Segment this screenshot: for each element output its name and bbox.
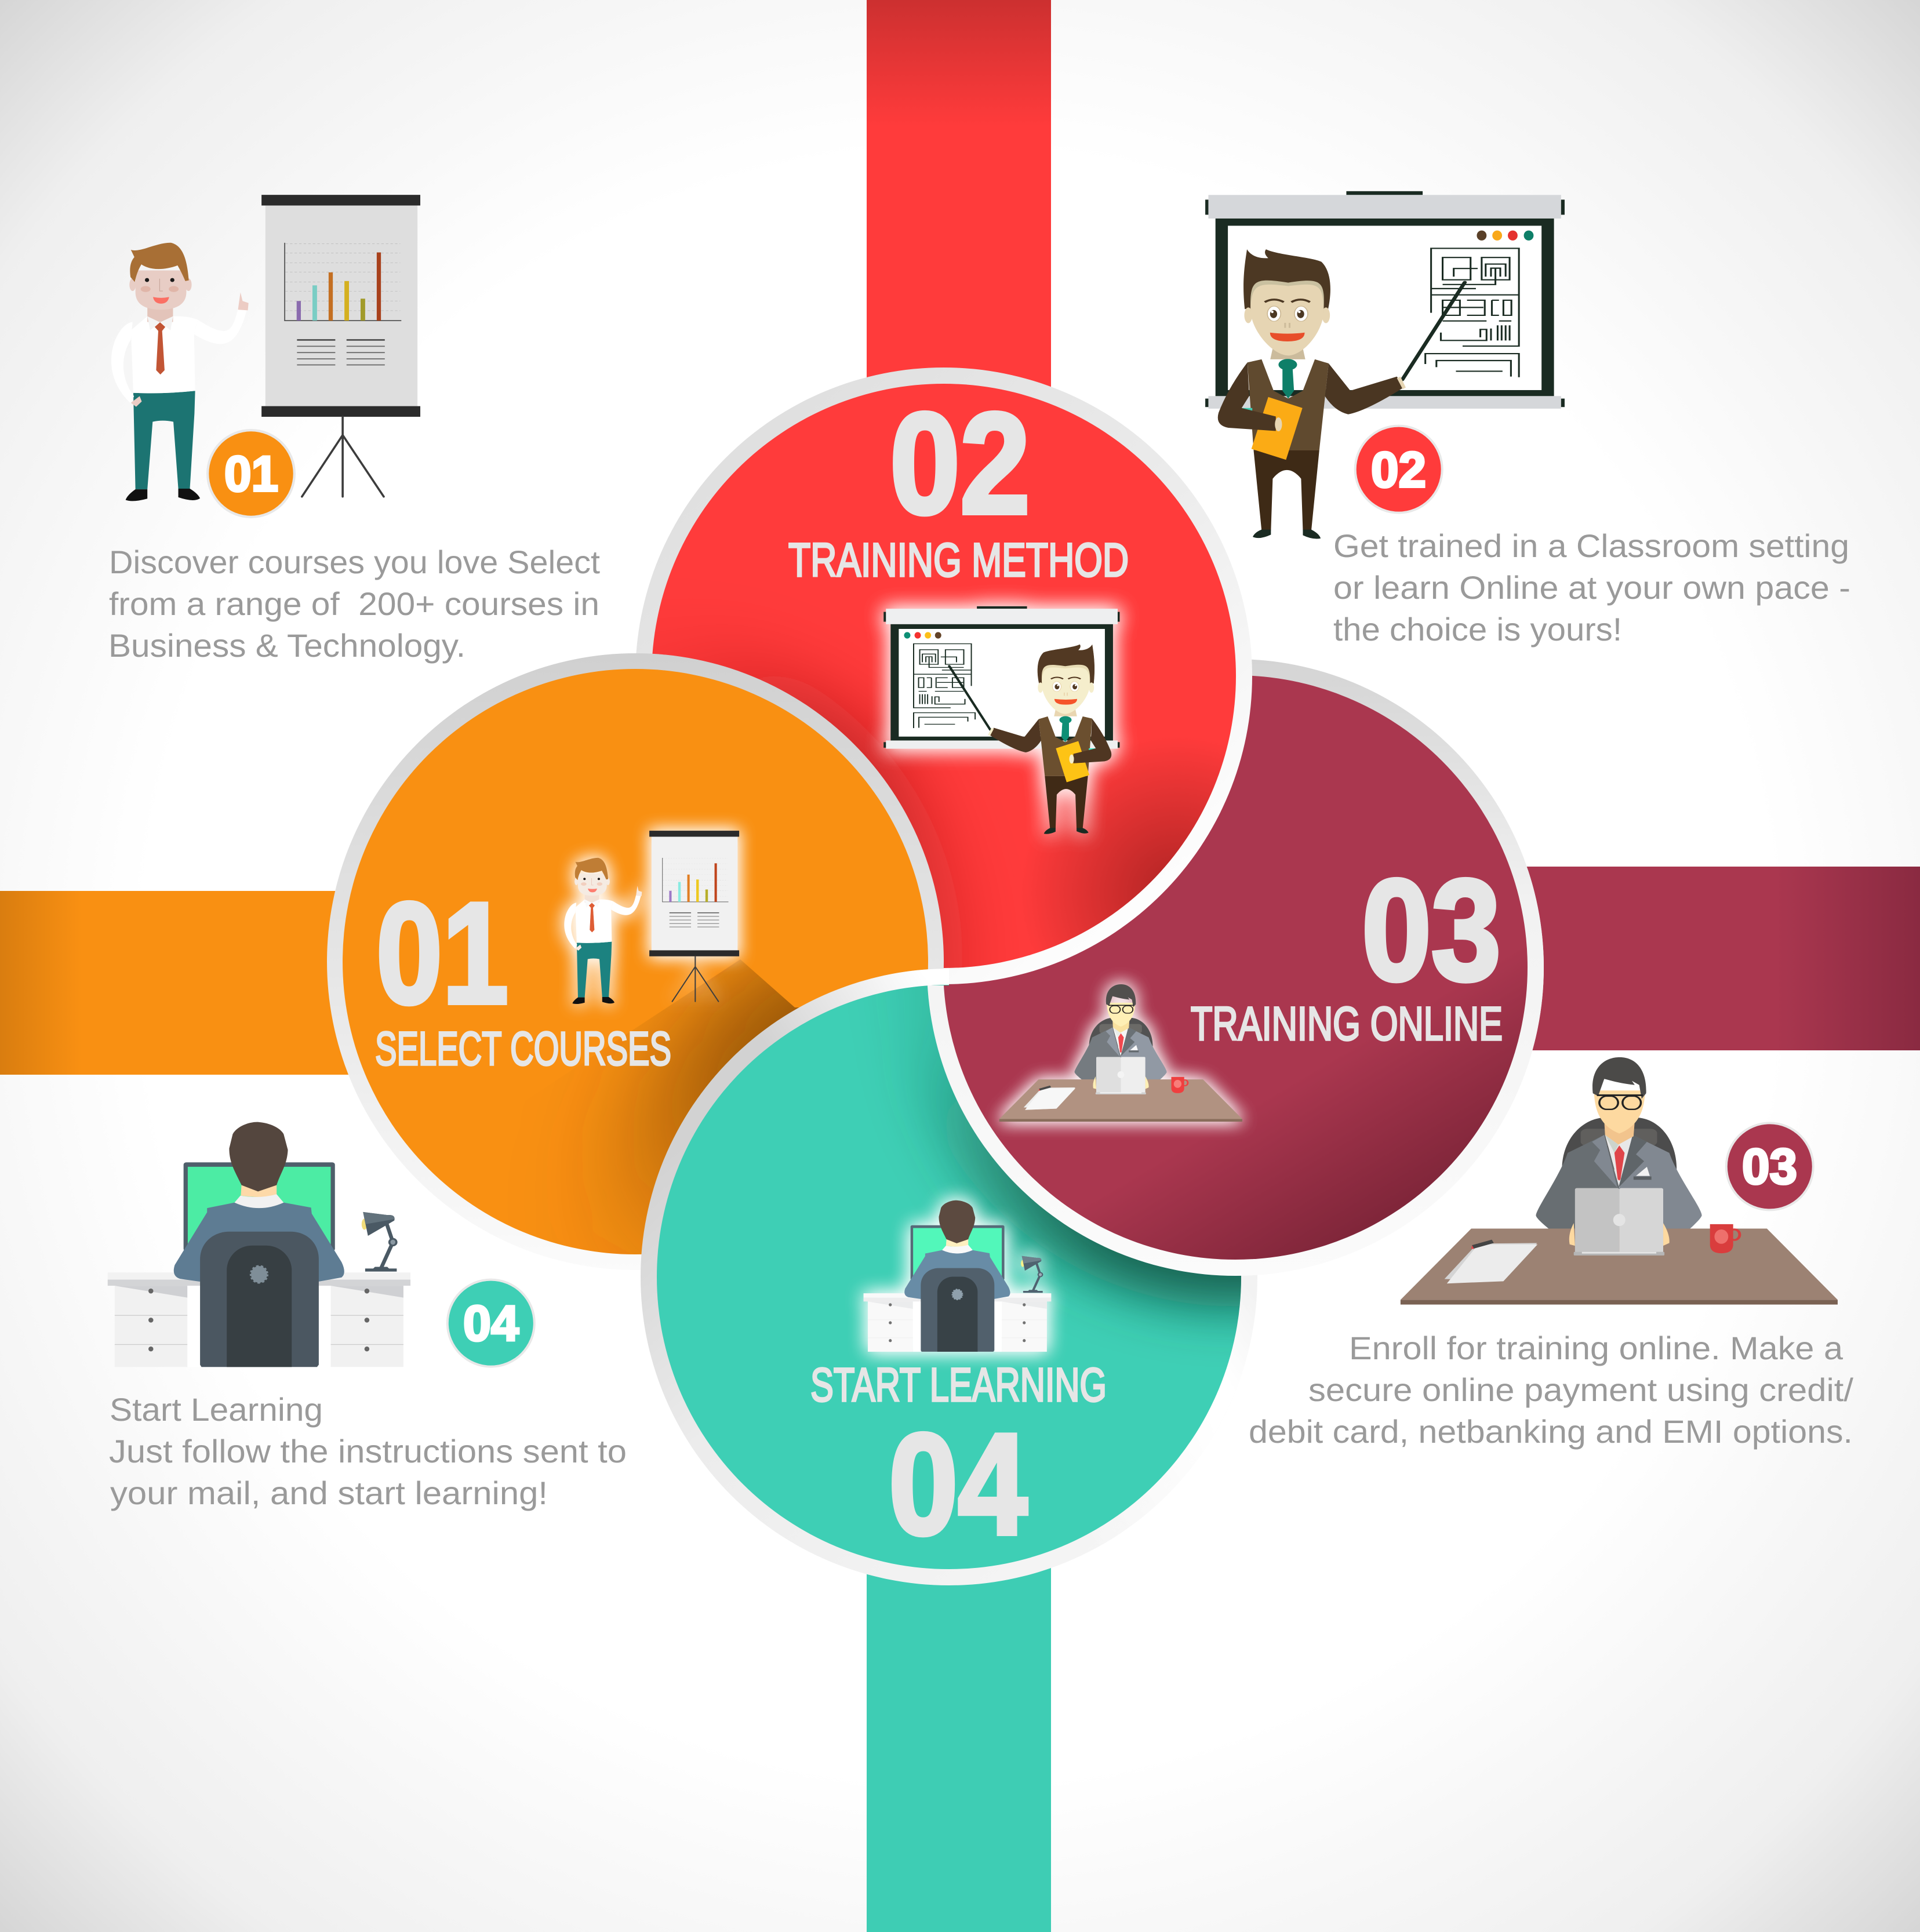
number: 04: 04 — [889, 1403, 1027, 1564]
badge: 03 — [1725, 1122, 1814, 1211]
circle: training online (overlap over start learning) — [928, 869, 1544, 1276]
text: step 1 description — [108, 544, 600, 664]
icon: presenter with flip chart (inside circle) — [564, 831, 739, 1004]
circle: start learning — [641, 969, 1257, 1585]
text: step 3 description: Enroll for training online. Make a — [1349, 1330, 1843, 1366]
icon: teacher at screen (inside circle) — [883, 606, 1119, 834]
illustration: teacher at screen — [1205, 191, 1565, 539]
circle: training method — [308, 368, 1333, 1289]
badge: 01: 01 — [224, 446, 278, 502]
band: bottom teal — [867, 1553, 1051, 1932]
badge: 03: 03 — [1742, 1139, 1797, 1195]
illustration: presenter with flip chart — [111, 195, 420, 501]
heading: training online: TRAINING ONLINE — [1191, 998, 1503, 1050]
circle: select courses — [327, 653, 944, 1254]
text: step 3 description: debit card, netbanking and EMI options. — [1249, 1413, 1853, 1450]
icon: man at laptop (inside circle) — [999, 984, 1242, 1122]
band: top red — [867, 0, 1051, 394]
text: step 1 description: from a range of 200+ courses in — [109, 585, 599, 622]
text: step 1 description: Business & Technology. — [108, 627, 466, 664]
badge: 04: 04 — [463, 1296, 519, 1352]
band: left orange — [0, 891, 371, 1075]
text: step 4 description: Just follow the instructions sent to — [109, 1433, 627, 1469]
number: 01: 01 — [376, 872, 508, 1034]
heading: select courses: SELECT COURSES — [375, 1023, 671, 1075]
text: step 3 description: secure online payment using credit/ — [1308, 1371, 1853, 1408]
illustration: man at laptop — [1401, 1057, 1838, 1305]
badge: 02 — [1354, 425, 1443, 514]
text: step 3 description — [1249, 1330, 1853, 1450]
heading: training method: TRAINING METHOD — [788, 534, 1129, 587]
text: step 4 description — [109, 1391, 627, 1511]
text: step 2 description — [1333, 527, 1850, 647]
circle: training online (base) — [927, 659, 1544, 1276]
number: 02: 02 — [890, 383, 1030, 544]
badge: 04 — [446, 1279, 536, 1368]
band: right maroon — [1507, 867, 1920, 1050]
icon: man at computer desk (inside circle) — [864, 1200, 1051, 1352]
text: step 4 description: your mail, and start learning! — [110, 1475, 548, 1511]
text: step 4 description: Start Learning — [110, 1391, 323, 1428]
illustration: man at computer desk — [108, 1122, 410, 1367]
heading: start learning: START LEARNING — [810, 1359, 1107, 1411]
text: step 2 description: or learn Online at your own pace - — [1333, 569, 1850, 606]
number: 03: 03 — [1362, 849, 1501, 1010]
text: step 2 description: Get trained in a Classroom setting — [1333, 527, 1849, 564]
circle: training method (lower right edge over training online) — [949, 812, 1221, 984]
text: step 1 description: Discover courses you love Select — [109, 544, 600, 580]
badge: 01 — [206, 429, 296, 518]
text: step 2 description: the choice is yours! — [1333, 611, 1622, 647]
badge: 02: 02 — [1371, 442, 1426, 498]
